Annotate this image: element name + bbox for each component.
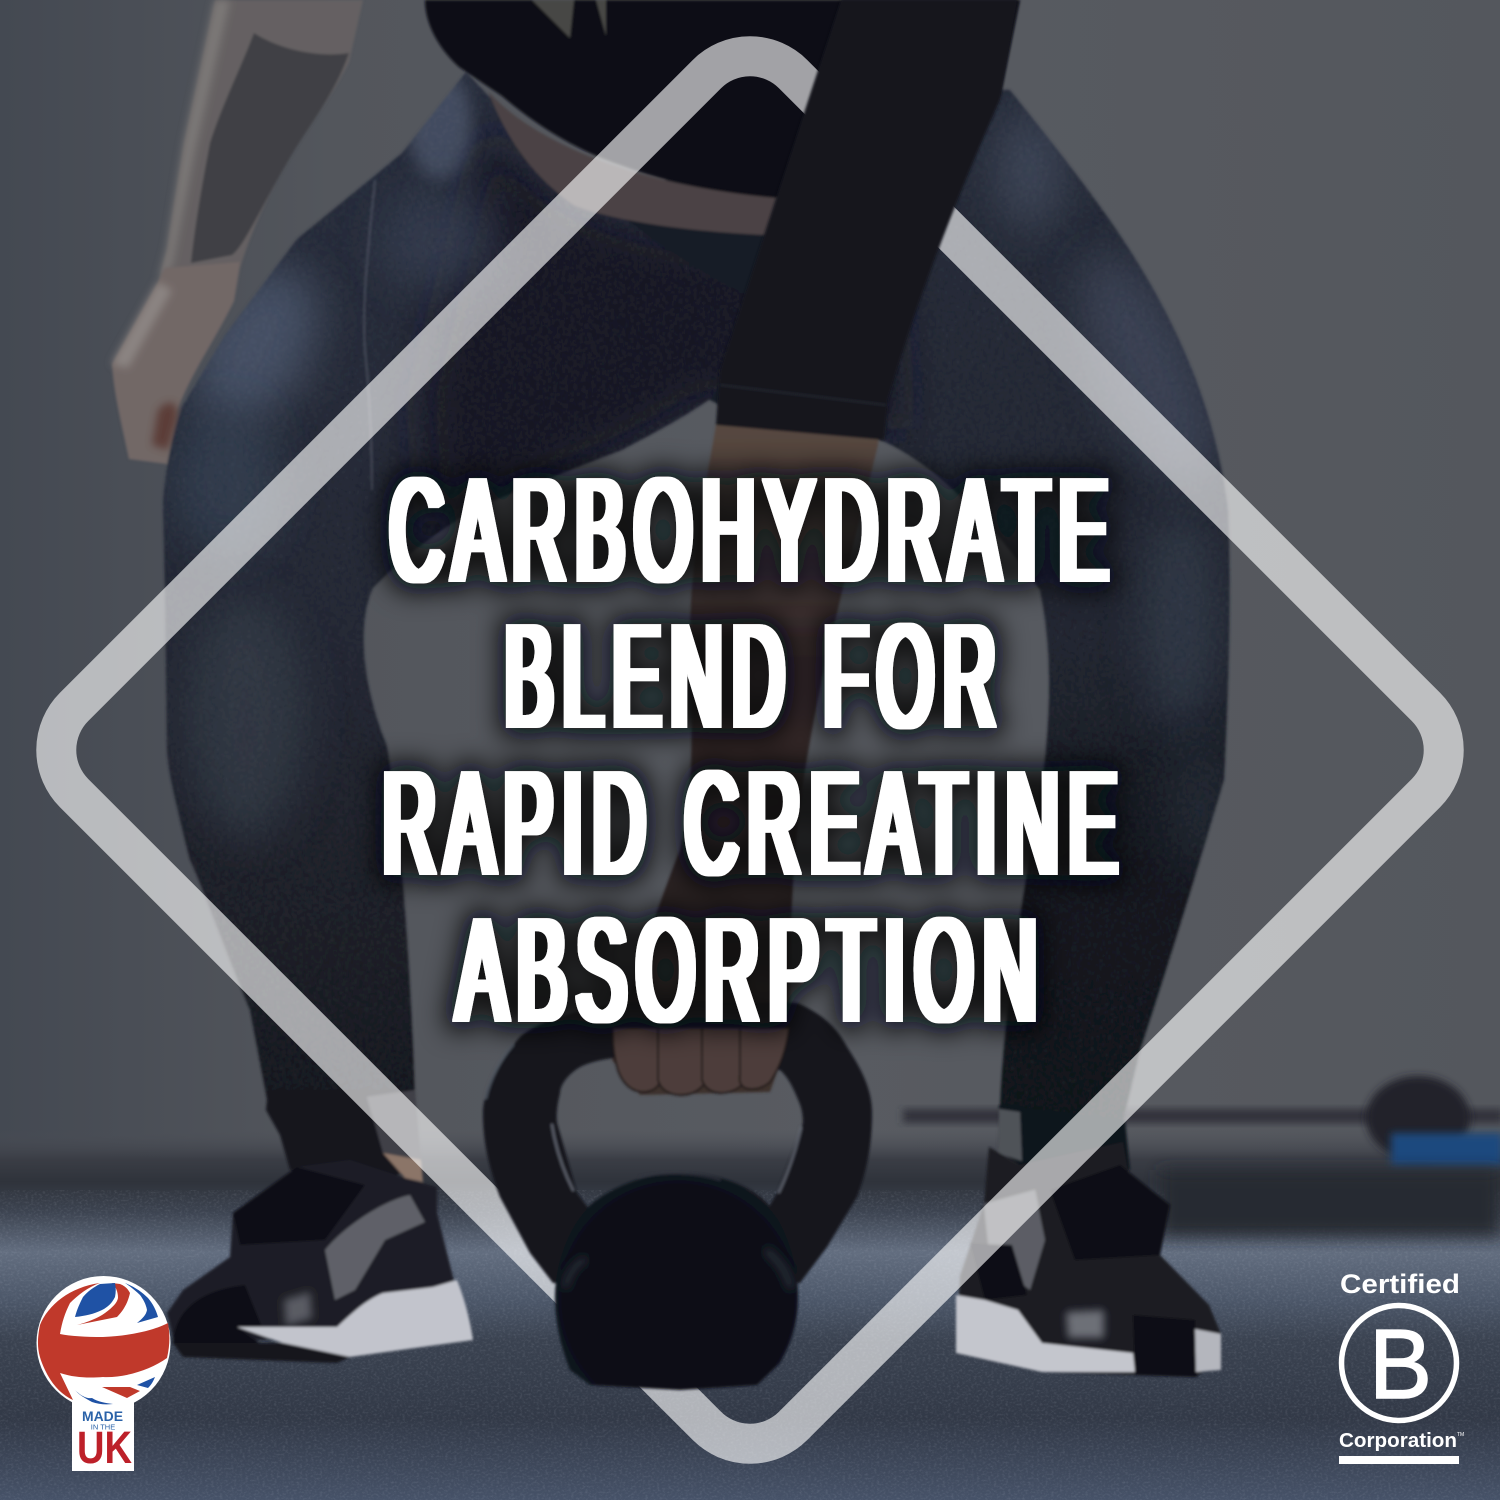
left shoe toe bumper <box>173 1285 262 1345</box>
sleeve cuff crease <box>720 385 886 405</box>
hand <box>112 262 240 464</box>
right sock <box>998 1109 1022 1161</box>
forearm <box>612 425 880 1095</box>
fabric highlights and hip shadow <box>150 60 1250 1120</box>
left shoe silver panel <box>325 1195 425 1300</box>
photo: athlete legs and torso <box>112 0 1250 1377</box>
left shoe toe highlight <box>284 1292 312 1326</box>
left sock <box>367 1090 421 1163</box>
kettlebell handle <box>483 1000 872 1283</box>
right shoe tip <box>1195 1329 1221 1372</box>
left shoe sole <box>237 1280 473 1357</box>
badge: Certified B Corporation: TM <box>1457 1432 1464 1438</box>
right shoe silver panel <box>984 1190 1045 1290</box>
hand fist <box>613 1028 789 1095</box>
right shoe toe bumper <box>1133 1315 1197 1377</box>
left ankle skin <box>383 1153 423 1182</box>
right shoe heel panel <box>970 1243 1027 1300</box>
right leg <box>720 80 1230 1125</box>
right shoe toe highlight <box>1066 1310 1104 1338</box>
crop top <box>425 0 1020 201</box>
badge: Made in the UK <box>36 1276 170 1473</box>
kettlebell body <box>555 1173 798 1390</box>
left shoe upper <box>167 1160 457 1345</box>
badge: Made in the UK: IN THE <box>91 1422 115 1432</box>
centre hips base <box>560 180 900 430</box>
right ankle sock <box>998 1105 1130 1170</box>
sleeve <box>716 0 1018 440</box>
headline <box>383 448 1127 1053</box>
badge: Certified B Corporation: B <box>1369 1309 1432 1419</box>
badge: Made in the UK: MADE <box>82 1409 123 1424</box>
left leg <box>163 72 760 1105</box>
hair <box>532 0 606 38</box>
right shoe upper <box>956 1142 1221 1377</box>
badge: Made in the UK: UK <box>77 1422 132 1473</box>
badge: Certified B Corporation <box>1339 1269 1464 1464</box>
kettlebell highlights <box>486 1045 801 1285</box>
left arm <box>112 0 363 464</box>
badge: Certified B Corporation: Certified <box>1340 1269 1460 1299</box>
palm shadow <box>152 403 177 450</box>
midriff skin <box>488 91 905 237</box>
left shoe laces <box>233 1167 365 1245</box>
hand lit edge <box>112 282 172 368</box>
left ankle and shoe collar <box>266 1090 420 1180</box>
arm tattoo <box>191 33 349 263</box>
right shoe sole <box>956 1295 1135 1372</box>
foreground arm and kettlebell <box>483 0 1018 1390</box>
leg seam <box>364 180 375 490</box>
left outsole <box>173 1343 350 1363</box>
right shoe laces <box>1050 1165 1170 1260</box>
badge: Certified B Corporation: Corporation <box>1339 1429 1457 1452</box>
left shoe pink patch <box>412 1187 436 1218</box>
arm highlight <box>158 0 230 282</box>
